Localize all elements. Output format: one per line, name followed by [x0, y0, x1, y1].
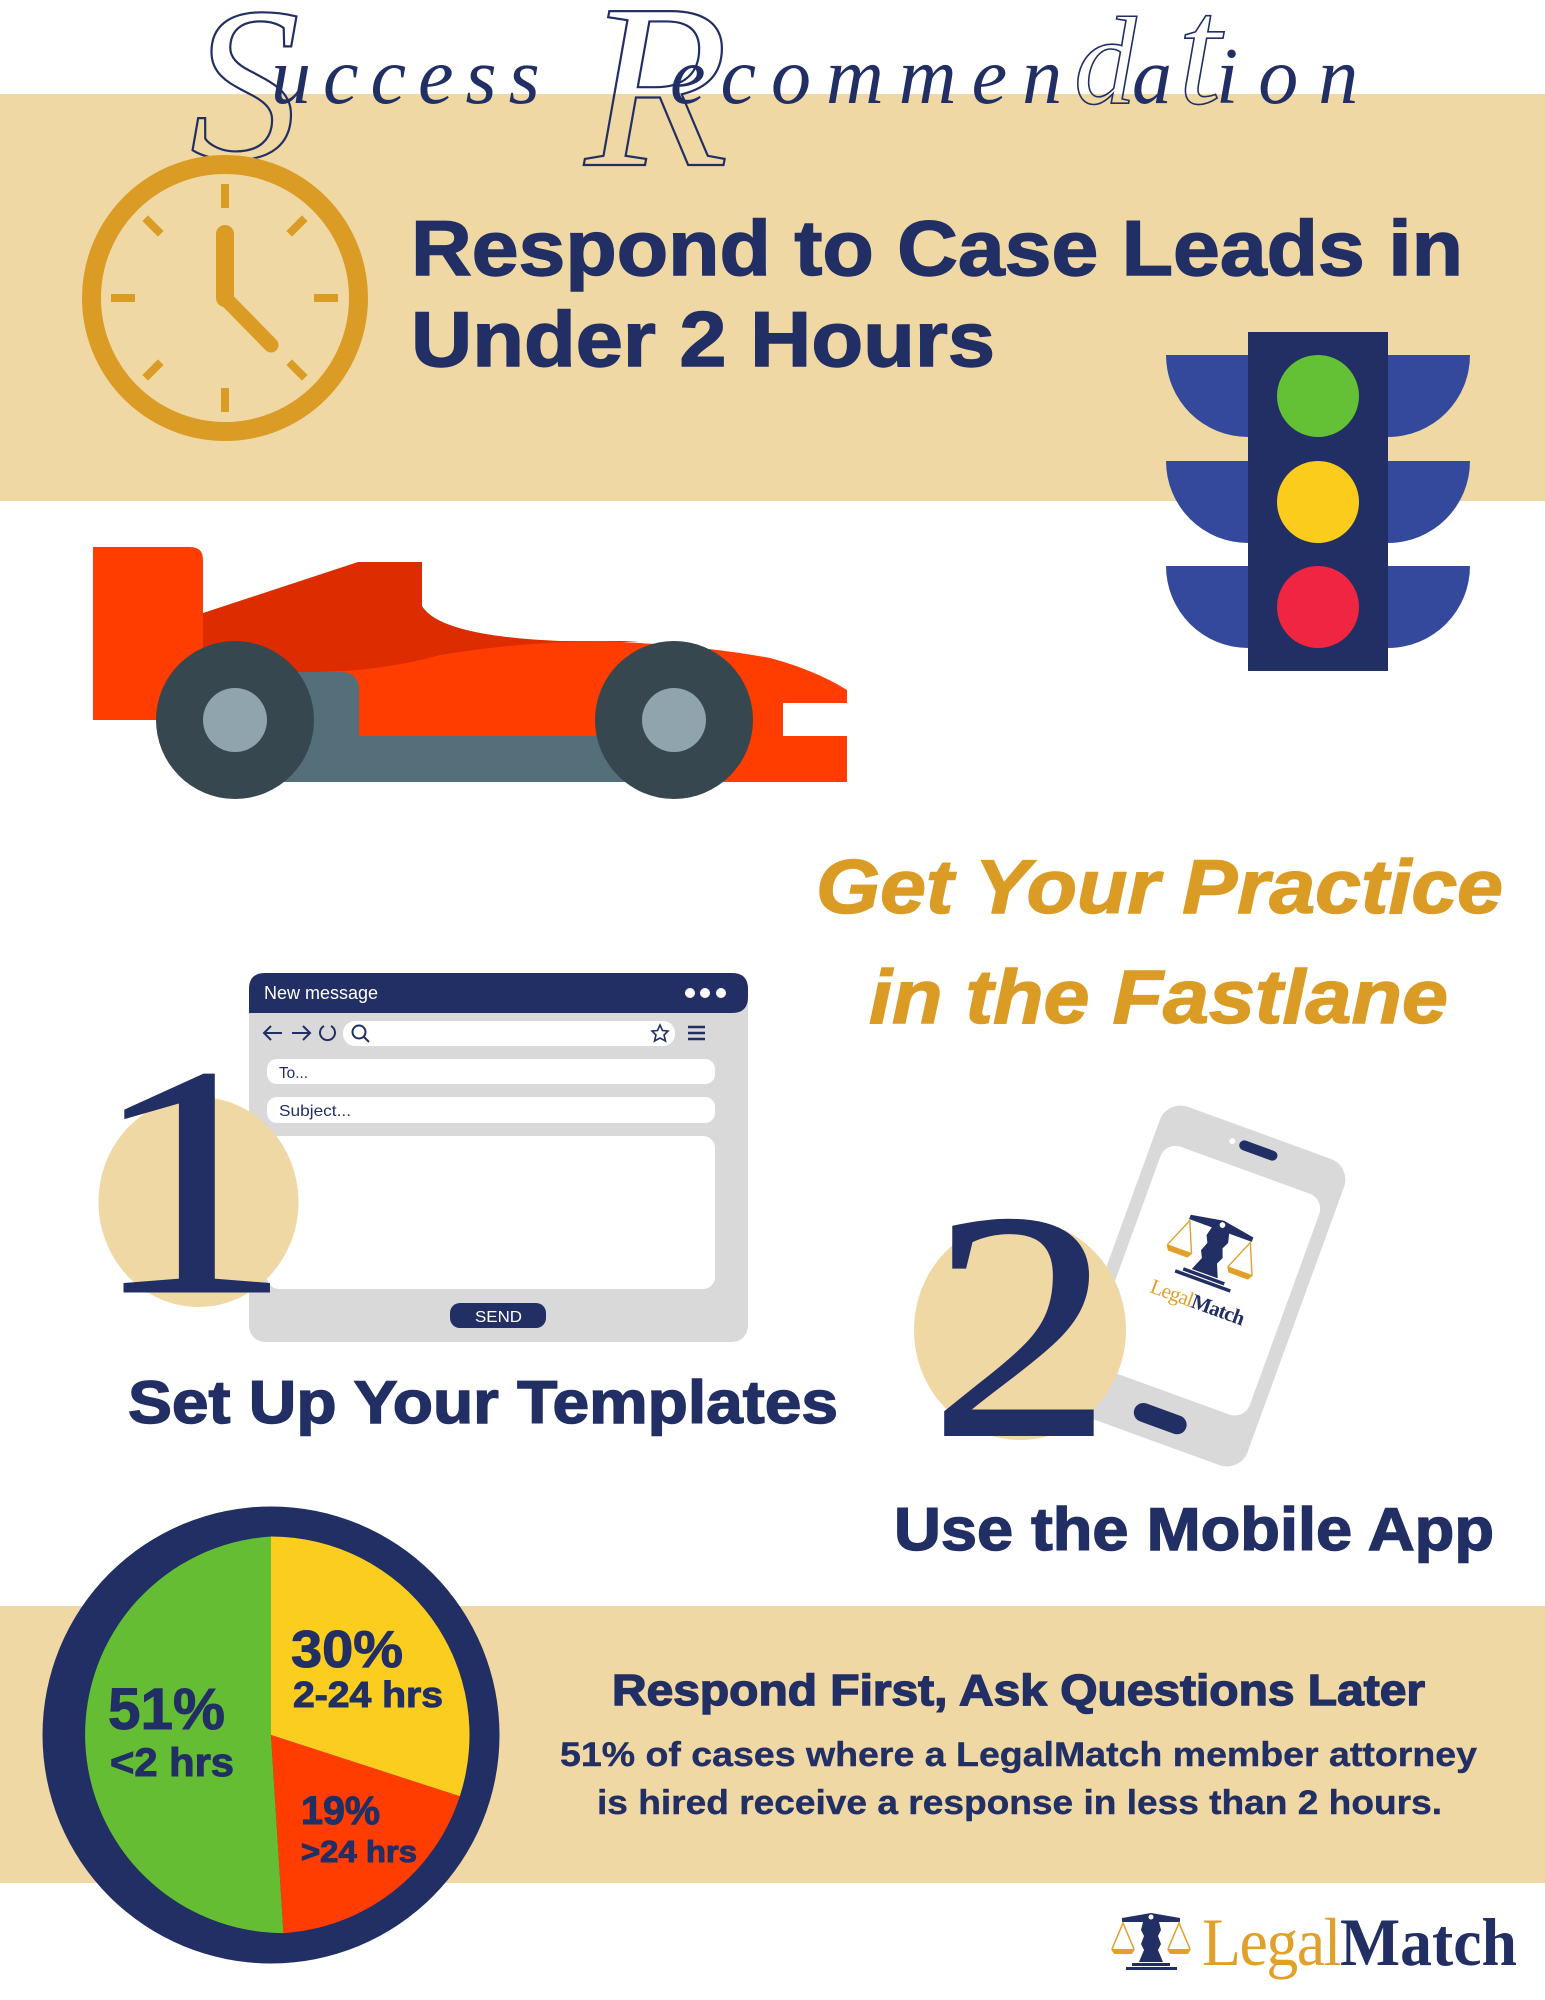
heading: use the mobile app: Use the Mobile App: [894, 1496, 1494, 1563]
title: a: [1132, 33, 1172, 121]
email window: SEND: [475, 1309, 522, 1326]
icon: traffic light: [1166, 332, 1470, 671]
pie label: 30%: 30%: [291, 1621, 403, 1679]
heading: get your practice in the fastlane: Get Your Practice: [816, 845, 1503, 930]
panel: bottom band: [0, 1606, 1545, 1883]
email window: Subject...: [279, 1103, 351, 1120]
number badge 2: 2: [929, 1146, 1113, 1506]
panel: top band: [0, 94, 1545, 501]
pie label: 19%: >24 hrs: [301, 1834, 417, 1869]
pie chart: [42, 1506, 500, 1964]
callout: respond first: is hired receive a response in less than 2 hours.: [597, 1784, 1442, 1822]
title: ecommen: [670, 33, 1077, 121]
callout: respond first: Respond First, Ask Questions Later: [612, 1666, 1425, 1715]
number badge 1: 1: [88, 998, 294, 1364]
title: uccess: [271, 33, 552, 121]
phone logo: [1158, 1205, 1267, 1298]
email window: New message: [264, 983, 378, 1003]
pie label: 30%: 2-24 hrs: [293, 1674, 443, 1715]
pie label: 51%: [108, 1677, 234, 1785]
heading: respond to case leads: [411, 204, 1463, 383]
email window: [249, 973, 748, 1342]
heading: get your practice in the fastlane: in the Fastlane: [869, 955, 1448, 1040]
icon: race car: [93, 547, 847, 799]
phone: [1056, 1099, 1352, 1473]
pie label: 51%: 51%: [108, 1677, 225, 1742]
title: ion: [1216, 33, 1378, 121]
pie label: 19%: [301, 1789, 417, 1869]
callout: respond first: [560, 1666, 1477, 1822]
heading: set up your templates: Set Up Your Templates: [128, 1369, 838, 1436]
heading: respond to case leads: Under 2 Hours: [411, 295, 995, 383]
pie label: 19%: 19%: [301, 1789, 380, 1833]
phone logo wordmark: LegalMatch: [1147, 1274, 1249, 1330]
icon: clock: [92, 164, 358, 432]
pie label: 51%: <2 hrs: [110, 1741, 234, 1785]
heading: get your practice in the fastlane: [816, 845, 1503, 1040]
email window: To...: [279, 1065, 308, 1082]
logo: LegalMatch: LegalMatch: [1202, 1904, 1517, 1980]
heading: respond to case leads: Respond to Case Leads in: [411, 204, 1463, 292]
callout: respond first: 51% of cases where a LegalMatch member attorney: [560, 1736, 1477, 1774]
pie label: 30%: [291, 1621, 443, 1715]
